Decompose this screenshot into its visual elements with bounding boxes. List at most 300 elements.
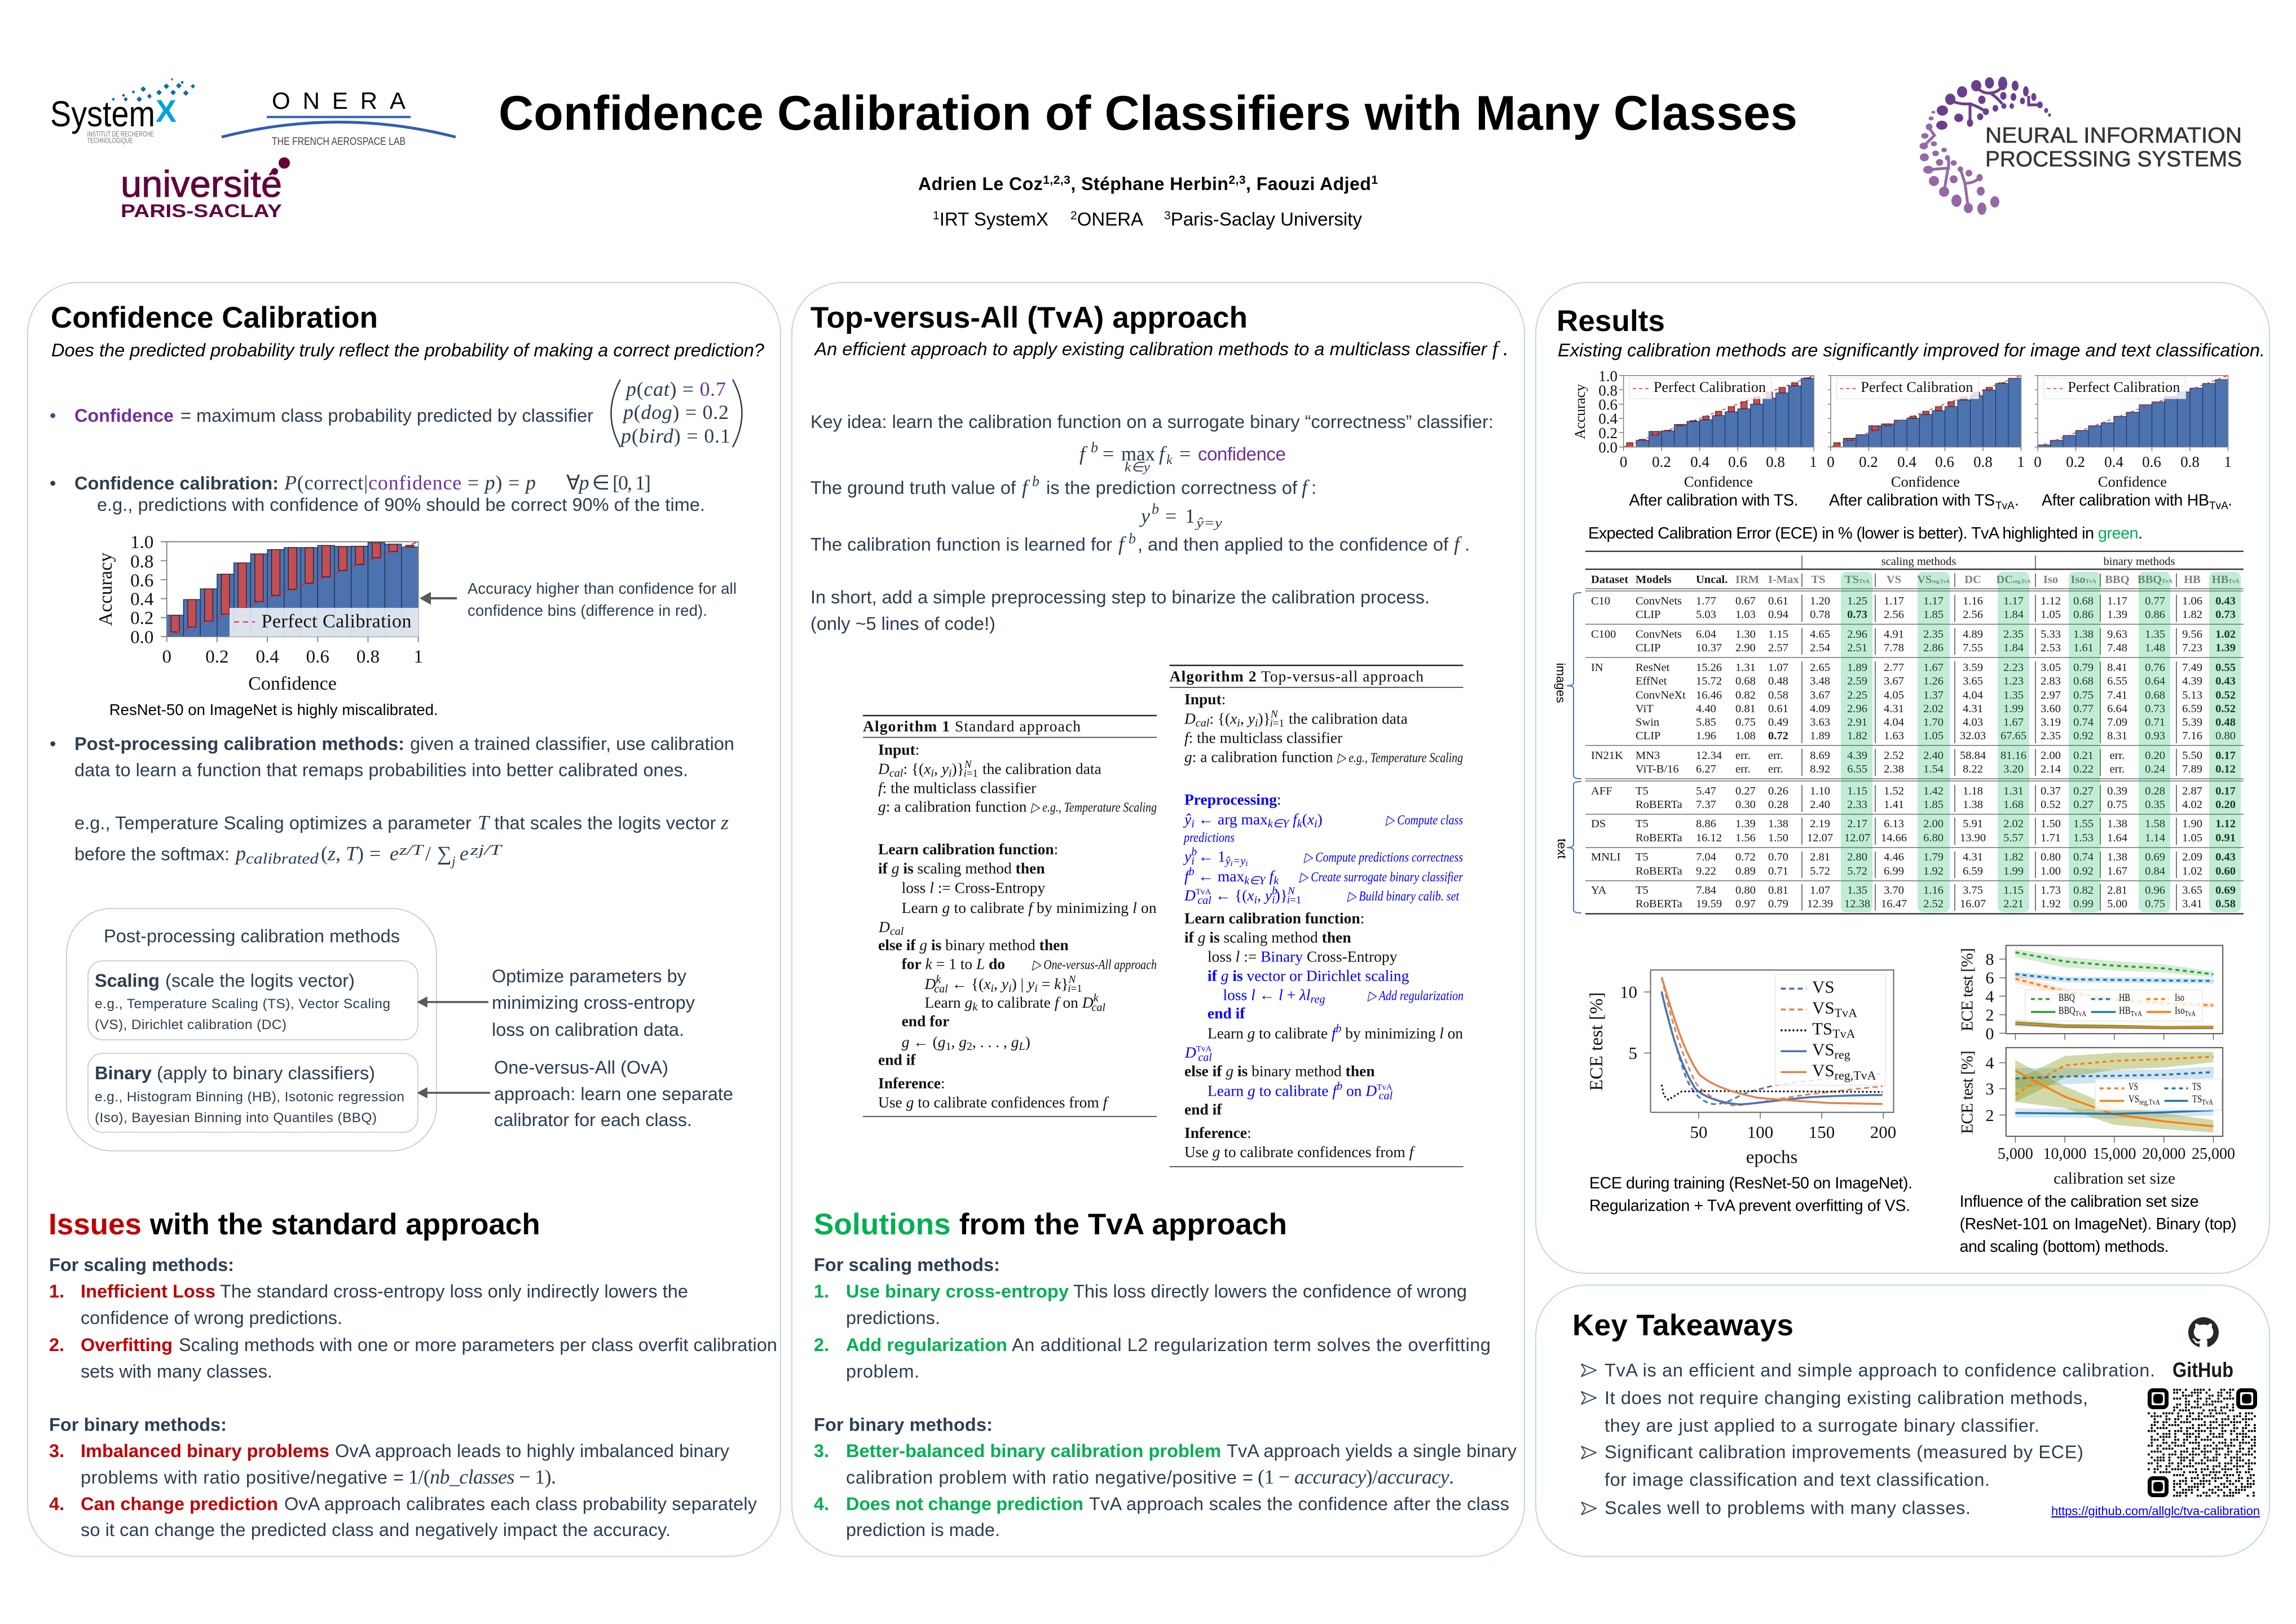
- table: ECE results: 1.23: [2003, 675, 2024, 687]
- bullet: confidence calibration definition: e.g., predictions with confidence of 90% should be correct 90% of the time.: [97, 495, 705, 515]
- table: ECE results: 2.23: [2003, 661, 2024, 674]
- list: issues with scaling methods: For scaling methods:: [49, 1255, 234, 1275]
- callout: accuracy higher than confidence: Accuracy higher than confidence for all: [468, 580, 737, 597]
- chart: reliability diagram ResNet-50: Accuracy: [95, 553, 116, 626]
- table: ECE results: I-Max: [1768, 573, 1799, 586]
- algorithm 2: top-versus-all approach: TvA: [1196, 1045, 1212, 1054]
- table: ECE results: 5.91: [1963, 818, 1983, 830]
- chart: reliability after TS: Perfect Calibration: [1654, 379, 1766, 395]
- algorithm 1: standard approach: : {(: [903, 760, 924, 778]
- algorithm 1: standard approach: end if: [878, 1051, 916, 1069]
- chart: reliability after TS: 0.8: [1766, 453, 1785, 470]
- bullet: confidence calibration definition: •: [50, 473, 56, 493]
- chart: reliability after TS: 0.6: [1728, 453, 1747, 470]
- table: ECE results: 0.79: [2073, 661, 2094, 674]
- algorithm 2: top-versus-all approach: Learn calibration function:: [1184, 909, 1364, 926]
- table: ECE results: 4.46: [1884, 851, 1904, 863]
- table: ECE results: scaling methods: [1881, 555, 1956, 568]
- formula: temperature scaling: [234, 842, 503, 869]
- algorithm 1: standard approach: i: [1034, 982, 1038, 995]
- preprocessing block (blue): D: [1184, 886, 1196, 904]
- chart: reliability after TS: Accuracy: [1572, 384, 1588, 439]
- table: ECE results: 3.65: [1963, 675, 1983, 687]
- table: ECE results: 2.54: [1810, 642, 1830, 654]
- preprocessing block (blue): (: [1302, 810, 1307, 828]
- table: ECE results: 1.37: [1923, 689, 1944, 701]
- algorithm 1: standard approach: i: [949, 767, 952, 780]
- QR code: [2149, 1390, 2256, 1495]
- table: ECE results: err.: [1768, 763, 1783, 775]
- algorithm 2: top-versus-all approach: Algorithm 2: [1170, 668, 1257, 685]
- table: ECE results: 2.81: [2107, 884, 2127, 897]
- text block: key idea: is the prediction correctness of: [1046, 478, 1298, 498]
- algorithm 1: standard approach: g: [959, 1033, 967, 1051]
- table: ECE results: 0.76: [2145, 661, 2165, 674]
- formula: surrogate classifier: =: [1103, 442, 1114, 465]
- chart: binary methods vs calibration set size: 0: [1985, 1025, 1994, 1043]
- algorithm 2: top-versus-all approach: else if g is binary method then: [1184, 1062, 1375, 1079]
- preprocessing block (blue): y: [1183, 848, 1192, 865]
- list: solutions for binary methods: For binary methods:: [814, 1414, 993, 1435]
- table: ECE results: 5.72: [1810, 865, 1830, 877]
- table: ECE results: 67.65: [2000, 730, 2026, 742]
- chart: reliability after TS TvA: 1: [2017, 453, 2025, 470]
- table: ECE results: 1.15: [1768, 628, 1788, 641]
- algorithm 1: standard approach: ← {(: [948, 975, 984, 992]
- card: scaling methods: (VS), Dirichlet calibration (DC): [95, 1017, 287, 1032]
- subtitle: An efficient approach to apply existing calibration methods to a multiclass classifier: [813, 339, 1488, 359]
- chart: ECE during training: TS: [1812, 1019, 1832, 1039]
- formula: temperature scaling: e: [460, 842, 469, 865]
- table: ECE results: T5: [1636, 785, 1649, 797]
- table: ECE results: 8.69: [1810, 749, 1830, 762]
- table: ECE results: RoBERTa: [1636, 865, 1682, 877]
- table: ECE results: 1.92: [1923, 865, 1944, 877]
- table: ECE results: 4.05: [1884, 689, 1904, 701]
- algorithm 2: top-versus-all approach: end if: [1184, 1101, 1222, 1118]
- algorithm 2: top-versus-all approach: Input:: [1184, 690, 1226, 708]
- table: ECE results: 12.38: [1844, 898, 1870, 910]
- table: ECE results: 8.92: [1810, 763, 1830, 775]
- table: ECE results: [1585, 551, 2244, 914]
- table: ECE results: 15.72: [1696, 675, 1722, 687]
- table: ECE results: 2.33: [1847, 798, 1867, 811]
- preprocessing block (blue): i=1: [1287, 894, 1301, 906]
- table: ECE results: 0.81: [1768, 884, 1788, 897]
- chart: ECE during training: reg,TvA: [1835, 1069, 1876, 1083]
- list: issues with binary methods: 1/(nb_classes − 1).: [408, 1466, 556, 1488]
- chart: binary methods vs calibration set size: Iso: [2175, 992, 2184, 1004]
- algorithm 1: standard approach: cal: [1091, 1001, 1105, 1014]
- algorithm 1: standard approach: y: [940, 760, 949, 778]
- table: ECE results: 1.30: [1735, 628, 1756, 641]
- algorithm 1: standard approach: N: [1068, 974, 1077, 986]
- table: ECE results: 1.17: [1923, 595, 1944, 607]
- formula: ground truth: y: [1139, 505, 1150, 527]
- chart: scaling methods vs calibration set size: calibration set size: [2053, 1170, 2175, 1188]
- table: ECE results: TS: [1811, 573, 1826, 586]
- authors: , Stéphane Herbin: [1070, 174, 1228, 194]
- table: ECE results: 0.70: [1768, 851, 1788, 863]
- chart: binary methods vs calibration set size: BBQ: [2059, 1005, 2081, 1017]
- preprocessing block (blue): Preprocessing:: [1184, 791, 1281, 808]
- table: ECE results: CLIP: [1636, 608, 1660, 621]
- card: scaling methods: (scale the logits vector): [165, 970, 355, 991]
- logo: ONERA: [222, 87, 456, 148]
- algorithm 2: top-versus-all approach: cal: [1198, 1052, 1212, 1064]
- chart: reliability diagram ResNet-50: 0.2: [205, 647, 229, 667]
- formula: surrogate classifier: f: [1159, 442, 1167, 465]
- algorithm 2: top-versus-all approach: g: a calibration function: [1184, 748, 1333, 766]
- bullet: post-processing calibration methods: T: [478, 811, 491, 834]
- table: ECE results: 1.82: [1847, 730, 1867, 742]
- algorithm 2: top-versus-all approach: x: [1229, 709, 1237, 727]
- chart: scaling methods vs calibration set size: 20,000: [2142, 1145, 2185, 1163]
- table: ECE results: 4.03: [1963, 716, 1983, 729]
- list: solutions for scaling methods: For scaling methods:: [814, 1255, 1000, 1275]
- table: ECE results: 2.87: [2182, 785, 2202, 797]
- table: ECE results: 16.47: [1881, 898, 1907, 910]
- chart: reliability after TS: 0.6: [1598, 396, 1618, 413]
- algorithm 2: top-versus-all approach: N: [1270, 708, 1279, 721]
- chart: reliability after TS: 0.2: [1598, 425, 1618, 442]
- list: solutions for scaling methods: Add regularization: [846, 1335, 1007, 1355]
- preprocessing block (blue): ŷ: [1183, 810, 1192, 828]
- table: ECE results: IRM: [1735, 573, 1759, 586]
- preprocessing block (blue): b: [1189, 866, 1195, 878]
- table: ECE results: 1.38: [1768, 818, 1788, 830]
- bullet: post-processing calibration methods: Post-processing calibration methods:: [74, 734, 404, 754]
- table: ECE results: 9.63: [2107, 628, 2127, 641]
- algorithm 1: standard approach: i: [931, 767, 934, 780]
- table: ECE results: 4.39: [1847, 749, 1867, 762]
- algorithm 2: top-versus-all approach: cal: [1196, 717, 1210, 730]
- brace: text group: text: [1555, 839, 1569, 859]
- table: ECE results: 1.16: [1963, 595, 1983, 607]
- algorithm 1: standard approach: cal: [890, 925, 904, 938]
- table: ECE results: 3.67: [1810, 689, 1830, 701]
- formula: temperature scaling: ∑: [437, 842, 452, 865]
- table: ECE results: 2.59: [1847, 675, 1867, 687]
- list: issues with binary methods: Can change prediction: [81, 1494, 278, 1514]
- table: ECE results: 5.13: [2182, 689, 2202, 701]
- table: ECE results: 3.59: [1963, 661, 1983, 674]
- table: ECE results: 0.73: [2215, 608, 2236, 621]
- table: ECE results: 10.37: [1696, 642, 1722, 654]
- algorithm 1: standard approach: g: [1011, 1033, 1019, 1051]
- table: ECE results: 8.31: [2107, 730, 2127, 742]
- list: solutions for binary methods: [814, 1414, 1517, 1540]
- table: ECE results: 0.28: [1768, 798, 1788, 811]
- table: ECE results: 2.35: [2041, 730, 2061, 742]
- table: ECE results: 0.75: [1735, 716, 1756, 729]
- table: ECE results: 1.54: [1923, 763, 1944, 775]
- table: ECE results: 4.31: [1884, 703, 1904, 715]
- table: ECE results: 1.85: [1923, 608, 1944, 621]
- note: scaling optimisation: [492, 966, 695, 1040]
- algorithm 1: standard approach: x: [923, 760, 931, 778]
- chart: reliability diagram ResNet-50: 0.0: [130, 628, 153, 648]
- table: ECE results: 0.48: [1768, 675, 1788, 687]
- table: ECE results: 0.73: [1847, 608, 1867, 621]
- caption: calibration set size: and scaling (bottom) methods.: [1960, 1238, 2169, 1256]
- table: ECE results: 0.26: [1768, 785, 1788, 797]
- formula: surrogate classifier: k∈y: [1125, 460, 1150, 475]
- text block: key idea: The calibration function is learned for: [810, 535, 1112, 555]
- table: ECE results: 1.26: [1923, 675, 1944, 687]
- table: ECE results: TSTvA: [1845, 573, 1870, 586]
- chart captions: After calibration with HB: [2042, 492, 2209, 510]
- algorithm 2: top-versus-all approach: ▷ e.g., Temperature Scaling: [1337, 751, 1463, 766]
- table: ECE results: 2.52: [1923, 898, 1944, 910]
- algorithm 1: standard approach: else if g is binary method then: [878, 936, 1069, 954]
- list: solutions for binary methods: 4.: [814, 1494, 829, 1514]
- formula: ground truth: =: [1165, 505, 1176, 527]
- table: ECE results: CLIP: [1636, 730, 1660, 742]
- table: ECE results: 1.03: [1735, 608, 1756, 621]
- chart: ECE during training: epochs: [1746, 1147, 1797, 1167]
- table: ECE results: 0.99: [2073, 898, 2094, 910]
- table: ECE results: 4.65: [1810, 628, 1830, 641]
- list: issues with binary methods: 3.: [49, 1441, 64, 1461]
- chart: binary methods vs calibration set size: [1958, 946, 2223, 1043]
- chart: binary methods vs calibration set size: Iso: [2175, 1005, 2188, 1017]
- preprocessing block (blue): ▷ Compute class: [1385, 813, 1463, 828]
- table: ECE results: 1.35: [1847, 884, 1867, 897]
- affiliations: 3: [1164, 209, 1171, 222]
- table: ECE results: 1.42: [1923, 785, 1944, 797]
- table: ECE results: 4.04: [1963, 689, 1983, 701]
- table: ECE results: 16.46: [1696, 689, 1722, 701]
- table: ECE results: 5.39: [2182, 716, 2202, 729]
- text block: key idea: b: [1032, 473, 1039, 489]
- preprocessing block (blue): N: [1287, 885, 1295, 897]
- table: ECE results: 1.25: [1847, 595, 1867, 607]
- table: ECE results: T5: [1636, 851, 1649, 863]
- algorithm 1: standard approach: ▷ e.g., Temperature Scaling: [1030, 800, 1157, 815]
- table: ECE results: 2.14: [2041, 763, 2061, 775]
- table: ECE results: 2.90: [1735, 642, 1756, 654]
- chart: reliability after HB TvA: 0.4: [2104, 453, 2123, 470]
- table: ECE results: err.: [2110, 749, 2125, 762]
- algorithm 2: top-versus-all approach: Inference:: [1184, 1124, 1251, 1141]
- table: ECE results: Iso: [2043, 573, 2058, 586]
- table: ECE results: 2.00: [1923, 818, 1944, 830]
- table: ECE results: ConvNets: [1636, 595, 1682, 607]
- table: ECE results: 1.67: [2003, 716, 2024, 729]
- logo: Universite Paris-Saclay: université: [121, 163, 282, 205]
- chart: scaling methods vs calibration set size: TS: [2192, 1093, 2205, 1105]
- formula: ground truth: 1: [1185, 505, 1195, 527]
- table: ECE results: 0.27: [1735, 785, 1756, 797]
- chart: ECE during training: 100: [1747, 1122, 1773, 1142]
- table: ECE results: 1.00: [2041, 865, 2061, 877]
- algorithm 1: standard approach: the calibration data: [982, 760, 1101, 778]
- chart: reliability after TS TvA: [1827, 376, 2025, 490]
- algorithm 2: top-versus-all approach: f: the multiclass classifier: [1184, 729, 1342, 747]
- formula: ground truth: ŷ=y: [1195, 516, 1222, 531]
- algorithm 1: standard approach: Learn calibration function:: [878, 840, 1058, 858]
- chart: reliability diagram ResNet-50: 1: [413, 647, 423, 667]
- table: ECE results: 0.43: [2215, 675, 2236, 687]
- chart: binary methods vs calibration set size: 8: [1985, 950, 1994, 969]
- table: ECE results: 1.52: [1884, 785, 1904, 797]
- table: ECE results: 9.56: [2182, 628, 2202, 641]
- table: ECE results: 1.38: [1963, 798, 1983, 811]
- list: issues with binary methods: [49, 1414, 757, 1540]
- table: ECE results: 4.40: [1696, 703, 1716, 715]
- chart: binary methods vs calibration set size: ECE test [%]: [1958, 948, 1976, 1031]
- heading: confidence calibration: Confidence Calibration: [51, 301, 378, 334]
- table: ECE results: 0.84: [2145, 865, 2165, 877]
- chart: reliability after TS TvA: Perfect Calibration: [1861, 379, 1973, 395]
- algorithm 2: top-versus-all approach: loss l ← l + λl: [1223, 986, 1311, 1004]
- chart caption: ResNet-50 on ImageNet is highly miscalibrated.: [109, 701, 438, 718]
- logo: SystemX: X: [156, 93, 177, 129]
- table: ECE results: 0.27: [2073, 798, 2094, 811]
- table: ECE results: 0.92: [2073, 730, 2094, 742]
- chart: scaling methods vs calibration set size: 5,000: [1998, 1145, 2033, 1163]
- preprocessing block (blue): i: [1231, 859, 1233, 868]
- list: issues with binary methods: For binary methods:: [49, 1414, 227, 1435]
- table: ECE results: 1.48: [2145, 642, 2165, 654]
- table: ECE results: 7.16: [2182, 730, 2202, 742]
- chart: scaling methods vs calibration set size: 25,000: [2192, 1145, 2235, 1163]
- table: ECE results: 0.69: [2145, 851, 2165, 863]
- chart: binary methods vs calibration set size: TvA: [2131, 1010, 2143, 1018]
- table: ECE results: 2.53: [2041, 642, 2061, 654]
- table: ECE results: 4.09: [1810, 703, 1830, 715]
- table: ECE results: 0.74: [2073, 716, 2094, 729]
- algorithm 1: standard approach: i: [991, 982, 994, 995]
- chart: scaling methods vs calibration set size: VS: [2128, 1093, 2142, 1105]
- preprocessing block (blue): x: [1307, 810, 1314, 828]
- table: ECE results: 1.16: [1923, 884, 1944, 897]
- algorithm 1: standard approach: 2: [967, 1040, 972, 1053]
- table: ECE results: 16.07: [1960, 898, 1986, 910]
- table: ECE results: 0.20: [2215, 798, 2236, 811]
- affiliations: ONERA: [1077, 209, 1143, 230]
- table: ECE results: 4.31: [1963, 851, 1983, 863]
- table: ECE results: 8.41: [2107, 661, 2127, 674]
- table: ECE results: 5.57: [2003, 832, 2024, 844]
- table: ECE results: 0.68: [2073, 675, 2094, 687]
- card: binary methods: e.g., Histogram Binning (HB), Isotonic regression: [95, 1089, 404, 1105]
- algorithm 1: standard approach: )}: [952, 760, 964, 778]
- affiliations: 1: [933, 209, 940, 222]
- formula: surrogate classifier: [1079, 439, 1286, 475]
- diagram: post-processing calibration methods box: Post-processing calibration methods: [104, 926, 400, 946]
- chart: binary methods vs calibration set size: 6: [1985, 969, 1994, 987]
- chart: reliability diagram ResNet-50: 0.4: [255, 647, 279, 667]
- bullet: confidence definition: •: [50, 405, 56, 426]
- algorithm 2: top-versus-all approach: D: [1365, 1082, 1377, 1100]
- preprocessing block (blue): ▷ Build binary calib. set: [1347, 889, 1460, 904]
- chart: ECE during training: 150: [1809, 1122, 1835, 1142]
- logo: SystemX: TECHNOLOGIQUE: [87, 136, 133, 144]
- algorithm 2: top-versus-all approach: Top-versus-all approach: [1261, 668, 1424, 685]
- logo: NeurIPS: NEURAL INFORMATION: [1985, 123, 2242, 148]
- table: ECE results: 1.15: [1847, 785, 1867, 797]
- table: ECE results: 1.07: [1768, 661, 1788, 674]
- table: ECE results: 0.73: [2145, 703, 2165, 715]
- table: ECE results: 1.17: [2003, 595, 2024, 607]
- algorithm 1: standard approach: ,: [951, 1033, 959, 1051]
- table: ECE results: 1.39: [1735, 818, 1756, 830]
- table: ECE results: 0.43: [2215, 851, 2236, 863]
- list: solutions for binary methods: 3.: [814, 1441, 829, 1461]
- link: GitHub repository: https://github.com/allglc/tva-calibration: [2051, 1504, 2260, 1518]
- table: ECE results: 1.58: [2145, 818, 2165, 830]
- list: issues with scaling methods: Inefficient Loss: [81, 1281, 215, 1301]
- table: ECE results: 0.86: [2145, 608, 2165, 621]
- table: ECE results: HB: [2184, 573, 2201, 586]
- table: ECE results: BBQ: [2105, 573, 2130, 586]
- list: solutions for scaling methods: problem.: [846, 1361, 919, 1382]
- algorithm 2: top-versus-all approach: i=1: [1270, 717, 1284, 730]
- table: ECE results: 81.16: [2000, 749, 2026, 762]
- algorithm 1: standard approach: =: [1038, 975, 1054, 992]
- algorithm 2: top-versus-all approach: D: [1184, 1044, 1196, 1061]
- table: ECE results: 12.07: [1844, 832, 1870, 844]
- table: ECE results: 1.05: [1923, 730, 1944, 742]
- algorithm 2: top-versus-all approach: end if: [1208, 1004, 1245, 1022]
- algorithm 2: top-versus-all approach: cal: [1379, 1090, 1393, 1102]
- table: ECE results: 2.35: [2003, 628, 2024, 641]
- table: ECE results: 7.04: [1696, 851, 1716, 863]
- text block: key idea: Key idea: learn the calibration function on a surrogate binary “correctness” classifier:: [810, 412, 1493, 432]
- logo: ONERA: THE FRENCH AEROSPACE LAB: [272, 136, 406, 148]
- algorithm 1: standard approach: g: a calibration function: [878, 797, 1027, 815]
- algorithm 2: top-versus-all approach: : {(: [1209, 709, 1230, 727]
- table: ECE results: 6.59: [1963, 865, 1983, 877]
- table: ECE results: 0.80: [2215, 730, 2236, 742]
- table: ECE results: 4.31: [1963, 703, 1983, 715]
- authors: , Faouzi Adjed: [1246, 174, 1371, 194]
- chart: ECE during training: VS: [1812, 977, 1835, 997]
- table: ECE results: 3.67: [1884, 675, 1904, 687]
- table: ECE results: IN: [1591, 661, 1603, 674]
- table: ECE results: 2.02: [1923, 703, 1944, 715]
- table: ECE results: 0.89: [1735, 865, 1756, 877]
- table: ECE results: 0.96: [2145, 884, 2165, 897]
- table: ECE results: 7.84: [1696, 884, 1716, 897]
- chart: reliability after TS TvA: 0: [1827, 453, 1835, 470]
- table: ECE results: 2.81: [1810, 851, 1830, 863]
- preprocessing block (blue): i: [1272, 894, 1275, 906]
- table: ECE results: 1.38: [2107, 818, 2127, 830]
- table: ECE results: 0.61: [1768, 703, 1788, 715]
- chart: reliability after TS: 0.2: [1652, 453, 1671, 470]
- table: ECE results: 1.55: [2073, 818, 2094, 830]
- table: ECE results: 0.92: [2073, 865, 2094, 877]
- authors: 2,3: [1228, 174, 1246, 187]
- logo: ONERA: ONERA: [272, 87, 406, 114]
- table: ECE results: 2.96: [1847, 703, 1867, 715]
- table: ECE results: 8.22: [1963, 763, 1983, 775]
- table: ECE results: 0.81: [1735, 703, 1756, 715]
- chart: reliability diagram ResNet-50: 0.2: [130, 608, 153, 629]
- table: ECE results: 1.82: [2182, 608, 2202, 621]
- algorithm 1: standard approach: k}: [1054, 975, 1069, 992]
- list: solutions for binary methods: calibration problem with ratio negative/positive =: [846, 1467, 1253, 1488]
- bullet: post-processing calibration methods: [50, 734, 734, 864]
- chart: scaling methods vs calibration set size: reg,TvA: [2139, 1098, 2161, 1107]
- logo: SystemX: INSTITUT DE RECHERCHE: [87, 130, 154, 138]
- preprocessing block (blue): f: [1270, 867, 1276, 885]
- table: ECE results: 1.73: [2041, 884, 2061, 897]
- table: ECE results: 1.31: [2003, 785, 2024, 797]
